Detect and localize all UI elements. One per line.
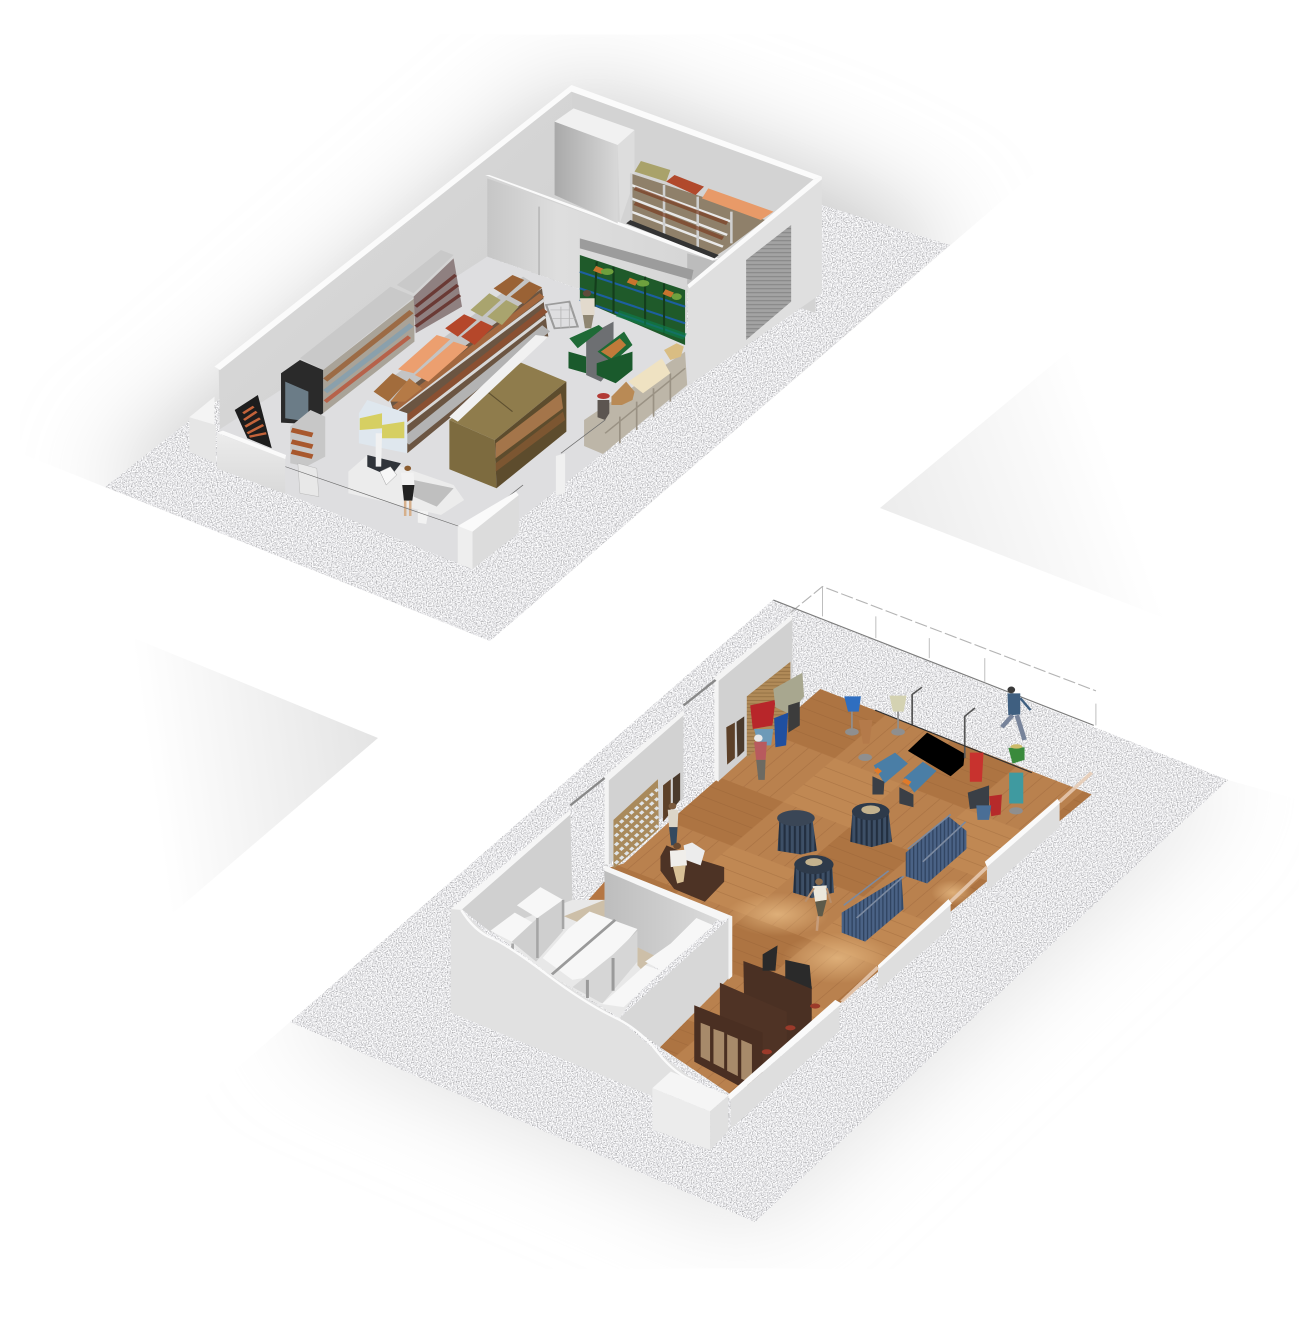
soft shadow: bottom block: [290, 760, 1228, 1222]
shopper with trolley: [546, 290, 595, 328]
round skirted tables: [777, 803, 892, 898]
back-of-house room walls: [451, 810, 732, 1018]
bottom store: fashion boutique: [451, 587, 1096, 1150]
checkout desk with cashier: [348, 433, 464, 524]
jeans rail near front: [842, 871, 904, 942]
room exterior walls: [451, 909, 732, 1096]
wooden bakery island: [449, 363, 566, 488]
folded tee racks: [872, 753, 937, 807]
shell walls and floor: [215, 85, 822, 565]
deli counter: [584, 343, 687, 454]
walking customer: [805, 878, 831, 931]
end cap: [359, 400, 407, 453]
front low walls with glass: [727, 773, 1092, 1129]
soft shadow: top block: [105, 90, 950, 641]
front left low wall and corner block: [189, 397, 286, 494]
clothing rail near mannequins: [968, 785, 1002, 820]
green stool figure: [1008, 744, 1025, 764]
wall panel 3 with hanging clothes: [684, 615, 804, 782]
produce wall rack: [580, 238, 693, 345]
corner block: [652, 1071, 728, 1150]
wall panel 2 with shoe display: [570, 710, 684, 869]
shaded block: right: [880, 170, 1299, 680]
rear walker on patio: [1002, 687, 1031, 740]
white stockroom shelving: [490, 887, 713, 1007]
mannequins: [844, 696, 1023, 814]
stock room shelving: [626, 161, 773, 258]
roller shutter: [746, 225, 791, 340]
cold room tower: [555, 108, 635, 223]
wall product display: [235, 395, 272, 448]
long refrigerated case: [300, 250, 462, 413]
black rug and display rails: [875, 687, 1032, 776]
right outer wall: [687, 177, 822, 385]
sales associate at wall: [668, 803, 678, 845]
rear glass balustrade: [773, 587, 1096, 725]
shaded block: left: [0, 590, 378, 1000]
gravel ground: top store: [105, 150, 950, 641]
glass shop front and entry post: [285, 420, 605, 527]
black beverage fridge: [281, 360, 323, 424]
infographic canvas: two isometric store cutaways: [99, 56, 1228, 1234]
cash desk with cashier: [660, 842, 724, 902]
wooden fitting room cubicles: [694, 945, 820, 1085]
central gondola shelving: [359, 275, 548, 453]
security gate and promo rack: [290, 410, 325, 497]
front right low wall: [458, 492, 519, 569]
top store: grocery supermarket: [189, 85, 822, 569]
gravel ground: bottom store: [290, 600, 1228, 1222]
parquet floor: [568, 689, 1092, 1094]
wine display: [597, 393, 610, 420]
jeans rail near window: [906, 814, 966, 884]
double-sided produce stand: [568, 322, 632, 383]
